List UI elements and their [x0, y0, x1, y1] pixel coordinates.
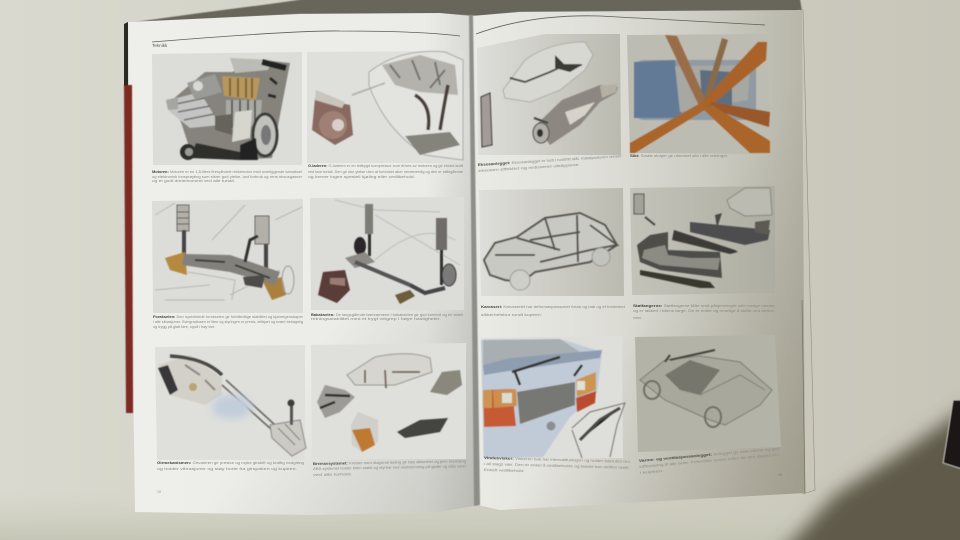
- illustration: engine: [166, 58, 290, 160]
- panel: gearbox: [155, 345, 306, 494]
- page number: 19: [778, 473, 782, 477]
- header rule: [152, 31, 460, 42]
- panel: heating and ventilation: [635, 335, 782, 477]
- shadow behind magazine: [128, 0, 802, 23]
- caption: i all slags vær. Den er enkel å vedlikeholde og bladet kan skiftes raskt.: [484, 462, 630, 470]
- panel: bumpers: [630, 186, 776, 320]
- caption: [639, 447, 781, 475]
- panel: brakes: [311, 343, 467, 477]
- illustration: car with ventilation system: [640, 350, 772, 427]
- caption: [153, 315, 304, 329]
- panel: engine: [152, 52, 303, 183]
- caption: Vindusvisker: Viskeren bak har intervallfunksjon og holder bakruten ren: [484, 456, 630, 464]
- illustration: rear of car with wiper: [481, 339, 625, 458]
- caption: Motoren: Motoren er en 1,8-liters firesylindret rekkemotor med overliggende kamaksel: [152, 170, 302, 174]
- caption: Varme- og ventilasjonsanlegget: Anlegget gir rask varme og god: [639, 447, 780, 463]
- panel: front axle: [152, 199, 304, 329]
- caption: Sikt: Smale stolper gir utmerket sikt i alle retninger.: [630, 154, 728, 158]
- illustration: car top view with sight lines: [630, 35, 770, 153]
- illustration: brake system parts: [317, 354, 462, 452]
- caption: [484, 456, 630, 476]
- illustration: car body shell: [484, 213, 617, 290]
- caption: Eksosanlegget: Eksosanlegget er helt i rustfritt stål. Katalysatoren renser: [478, 154, 623, 167]
- dark object at right edge: [943, 400, 960, 470]
- page number: 18: [157, 490, 161, 494]
- red edge of cover: [124, 85, 133, 413]
- panel: body: [479, 188, 625, 317]
- caption: ved.: [633, 316, 642, 320]
- caption: ABS-systemet holder bilen stabil og styrbar ved nedbremsing på glatte og våte veier: [313, 464, 467, 471]
- caption: [313, 459, 467, 477]
- caption: og elektronisk innsprøyting som sikrer god ytelse, lavt forbruk og rene eksosgasser: [152, 175, 303, 179]
- panel: rear wiper: [481, 336, 630, 476]
- heading: Teknikk: Teknikk: [152, 43, 168, 48]
- caption: sikkerhetsbur rundt kupeen.: [481, 313, 542, 317]
- caption: G-laderen: G-laderen er en lettbygd kompressor som drives av motoren og gir ekstra kraft: [308, 164, 463, 168]
- caption: [152, 170, 303, 183]
- illustration: exhaust and catalytic converter: [481, 42, 618, 147]
- back pages edge on right: [798, 10, 815, 494]
- caption: eksosen effektivt og reduserer utslippene.: [478, 163, 580, 173]
- panel: rear axle: [310, 197, 464, 321]
- caption: luftfordeling til alle seter. Pollenfilter renser luften før den slippes inn.: [639, 453, 780, 469]
- caption: Enkelt vedlikehold.: [484, 468, 525, 473]
- caption: ved lave turtall. Den gir stor ytelse uten at forbruket øker nevneverdig og den er stillegående: [308, 170, 463, 174]
- caption: og holder vibrasjoner og støy borte fra girspaken og kupeen.: [157, 467, 297, 471]
- caption: ved alle forhold.: [313, 472, 352, 477]
- panel: exhaust: [477, 34, 623, 173]
- caption: i kupeen.: [640, 469, 664, 475]
- illustration: bumpers and car outline: [634, 188, 772, 288]
- panel: visibility: [627, 34, 770, 158]
- caption: [481, 305, 625, 317]
- caption: og er lakkert i bilens farge. De er enkle og rimelige å skifte ved behov.: [633, 309, 775, 313]
- illustration: supercharger and car outline: [312, 51, 463, 160]
- caption: [478, 154, 623, 173]
- caption: i alle situasjoner. Svingradiusen er liten og styringen er presis, lettkjørt og svært behagelig: [153, 320, 303, 324]
- panel: left page: [124, 13, 478, 515]
- caption: og krever ingen spesiell kjøling eller vedlikehold.: [308, 175, 415, 179]
- caption: Bremsesystemet: Kretser med diagonal deling gir høy sikkerhet og jevn bremsing: [313, 459, 466, 466]
- caption: [157, 461, 304, 471]
- illustration: rear suspension: [318, 200, 460, 304]
- caption: retningsstabilitet med et trygt veigrep i høye hastigheter.: [311, 317, 441, 321]
- illustration: front suspension: [155, 203, 302, 300]
- caption: Støtfangerne: Støtfangerne tåler små påkjenninger uten varige skader: [633, 304, 776, 308]
- caption: [308, 164, 463, 179]
- caption: Bakakselen: De langsgående bærearmene i bakakselen gir god komfort og en stabil: [311, 313, 463, 317]
- caption: Girmekanismen: Girvaieren gir presise og myke girskift og kraftig nedgiring: [157, 461, 304, 465]
- caption: og et godt dreiemoment ved alle turtall.: [152, 179, 235, 183]
- spine: [469, 15, 480, 506]
- caption: [311, 313, 463, 321]
- black cover edge: [124, 22, 128, 86]
- caption: Forakselen: Den nyutviklede forakselen gir forbilledlige stabilitet og kjøreegenskaper: [153, 315, 304, 319]
- illustration: gear linkage: [158, 355, 306, 456]
- caption: Karosseri: Karosseriet har deformasjonssoner foran og bak og et forsterket: [481, 305, 625, 309]
- panel: G-lader: [307, 51, 463, 179]
- caption: og trygg på glatt føre, også i høy fart.: [153, 325, 215, 329]
- header rule: [476, 16, 765, 34]
- cast shadow lower right: [775, 405, 960, 540]
- panel: right page: [469, 10, 805, 510]
- caption: [633, 304, 776, 320]
